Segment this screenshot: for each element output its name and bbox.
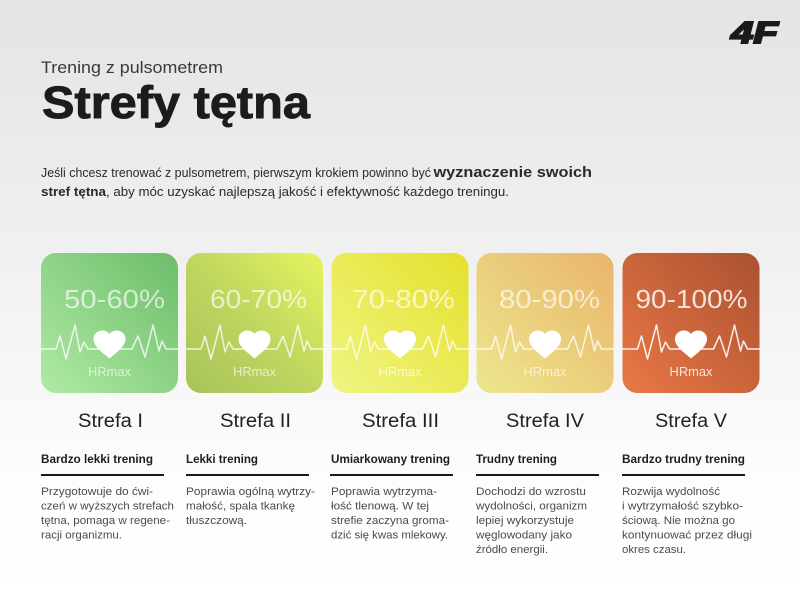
column: zone 4 description: węglowodany jako bbox=[475, 530, 572, 542]
column: zone 5 description: Bardzo trudny trening bbox=[622, 454, 745, 466]
label HRmax: HRmax bbox=[670, 364, 713, 379]
column: zone 2 description bbox=[186, 454, 315, 527]
percent 90-100%: 90-100% bbox=[636, 284, 747, 314]
column: zone 3 description: Poprawia wytrzyma- bbox=[331, 486, 437, 498]
label HRmax: HRmax bbox=[378, 364, 422, 379]
label HRmax: HRmax bbox=[233, 364, 276, 379]
intro paragraph: wyznaczenie swoich bbox=[432, 165, 592, 181]
column: zone 5 description: okres czasu. bbox=[622, 544, 686, 556]
icon: heart bbox=[529, 330, 561, 358]
icon: heart bbox=[238, 330, 270, 358]
column: zone 1 description: Przygotowuje do ćwi- bbox=[41, 486, 153, 498]
column: zone 3 description: Umiarkowany trening bbox=[331, 454, 450, 466]
column: zone 5 description: ściową. Nie można go bbox=[622, 515, 735, 527]
heading: Strefa IV: Strefa IV bbox=[506, 411, 584, 432]
label HRmax: HRmax bbox=[524, 364, 567, 379]
column: zone 2 description: Lekki trening bbox=[186, 454, 258, 466]
pulse line bbox=[622, 325, 760, 359]
panel: card zone 1 bbox=[41, 253, 178, 393]
panel: card zone 4 bbox=[476, 253, 614, 393]
column: zone 5 description: Rozwija wydolność bbox=[622, 486, 721, 498]
panel: card zone 2 bbox=[186, 253, 323, 393]
heading: Strefa V: Strefa V bbox=[655, 411, 727, 432]
logo: 4F: 4F bbox=[730, 15, 779, 50]
intro paragraph: stref tętna bbox=[41, 184, 107, 199]
percent 80-90%: 80-90% bbox=[499, 284, 600, 314]
label HRmax: HRmax bbox=[88, 364, 131, 379]
subtitle: Trening z pulsometrem bbox=[41, 58, 223, 77]
icon: heart bbox=[94, 330, 126, 358]
icon: heart bbox=[384, 330, 416, 358]
panel: card zone 3 bbox=[332, 253, 468, 393]
column: zone 2 description: małość, spala tkankę bbox=[186, 500, 295, 512]
percent 60-70%: 60-70% bbox=[210, 284, 307, 314]
column: zone 3 description: dzić się kwas mlekowy. bbox=[331, 530, 448, 542]
heading: Strefa II: Strefa II bbox=[220, 411, 291, 432]
percent 50-60%: 50-60% bbox=[64, 284, 165, 314]
pulse line bbox=[476, 325, 614, 359]
pulse line bbox=[186, 325, 323, 359]
icon: heart bbox=[675, 330, 707, 358]
intro paragraph: Jeśli chcesz trenować z pulsometrem, pierwszym krokiem powinno być bbox=[41, 165, 431, 180]
column: zone 4 description: lepiej wykorzystuje bbox=[476, 515, 574, 527]
pulse line bbox=[332, 325, 468, 359]
column: zone 3 description: łość tlenową. W tej bbox=[331, 500, 429, 512]
heading: Strefa I: Strefa I bbox=[78, 411, 143, 432]
column: zone 1 description: Bardzo lekki trening bbox=[41, 454, 153, 466]
column: zone 3 description bbox=[330, 454, 453, 542]
column: zone 5 description: i wytrzymałość szybko- bbox=[622, 500, 743, 512]
percent 70-80%: 70-80% bbox=[352, 284, 455, 314]
column: zone 1 description: tętna, pomaga w regene- bbox=[41, 515, 170, 527]
column: zone 5 description: kontynuować przez długi bbox=[622, 530, 752, 542]
column: zone 2 description: tłuszczową. bbox=[186, 515, 247, 527]
column: zone 2 description: Poprawia ogólną wytrzy- bbox=[186, 486, 315, 498]
column: zone 1 description: racji organizmu. bbox=[41, 530, 122, 542]
column: zone 4 description: źródło energii. bbox=[476, 544, 548, 556]
heading: Strefa III: Strefa III bbox=[362, 411, 439, 432]
column: zone 3 description: strefie zaczyna groma- bbox=[331, 515, 449, 527]
pulse line bbox=[41, 325, 178, 359]
column: zone 4 description bbox=[475, 454, 599, 556]
intro paragraph: , aby móc uzyskać najlepszą jakość i efektywność każdego treningu. bbox=[106, 184, 509, 199]
panel: card zone 5 bbox=[622, 253, 760, 393]
column: zone 1 description: czeń w wyższych strefach bbox=[41, 500, 174, 512]
title: Strefy tętna bbox=[42, 77, 311, 128]
intro paragraph bbox=[41, 165, 592, 199]
column: zone 4 description: Dochodzi do wzrostu bbox=[476, 486, 586, 498]
column: zone 1 description bbox=[41, 454, 174, 542]
column: zone 4 description: Trudny trening bbox=[476, 454, 557, 466]
column: zone 4 description: wydolności, organizm bbox=[475, 500, 587, 512]
column: zone 5 description bbox=[622, 454, 752, 556]
